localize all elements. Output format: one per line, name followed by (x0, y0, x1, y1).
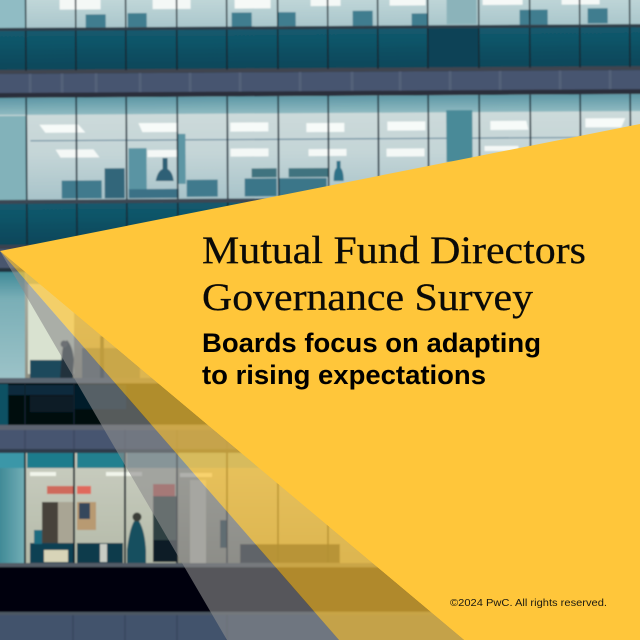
translucent grey wedge (0, 251, 339, 640)
title (202, 229, 586, 319)
black spandrel (0, 567, 640, 612)
title: Mutual Fund Directors (202, 229, 586, 272)
lower window row (0, 453, 640, 564)
mullions upper rows (26, 0, 630, 71)
lower teal panels (0, 200, 640, 246)
lower grey band (0, 425, 640, 453)
subtitle (202, 328, 541, 390)
mid grey band (0, 245, 640, 272)
third window row (0, 272, 640, 379)
upper grey band (0, 66, 640, 98)
translucent yellow wedge (0, 251, 464, 640)
top window row (0, 0, 640, 29)
main window row (0, 94, 640, 201)
bottom grey band (0, 612, 640, 640)
upper floors (0, 0, 640, 246)
top teal panels (0, 27, 640, 71)
copyright note: ©2024 PwC. All rights reserved. (450, 597, 607, 609)
dark spandrel row (0, 383, 640, 426)
title: Governance Survey (202, 276, 534, 319)
subtitle: to rising expectations (202, 360, 486, 390)
subtitle: Boards focus on adapting (202, 328, 541, 358)
